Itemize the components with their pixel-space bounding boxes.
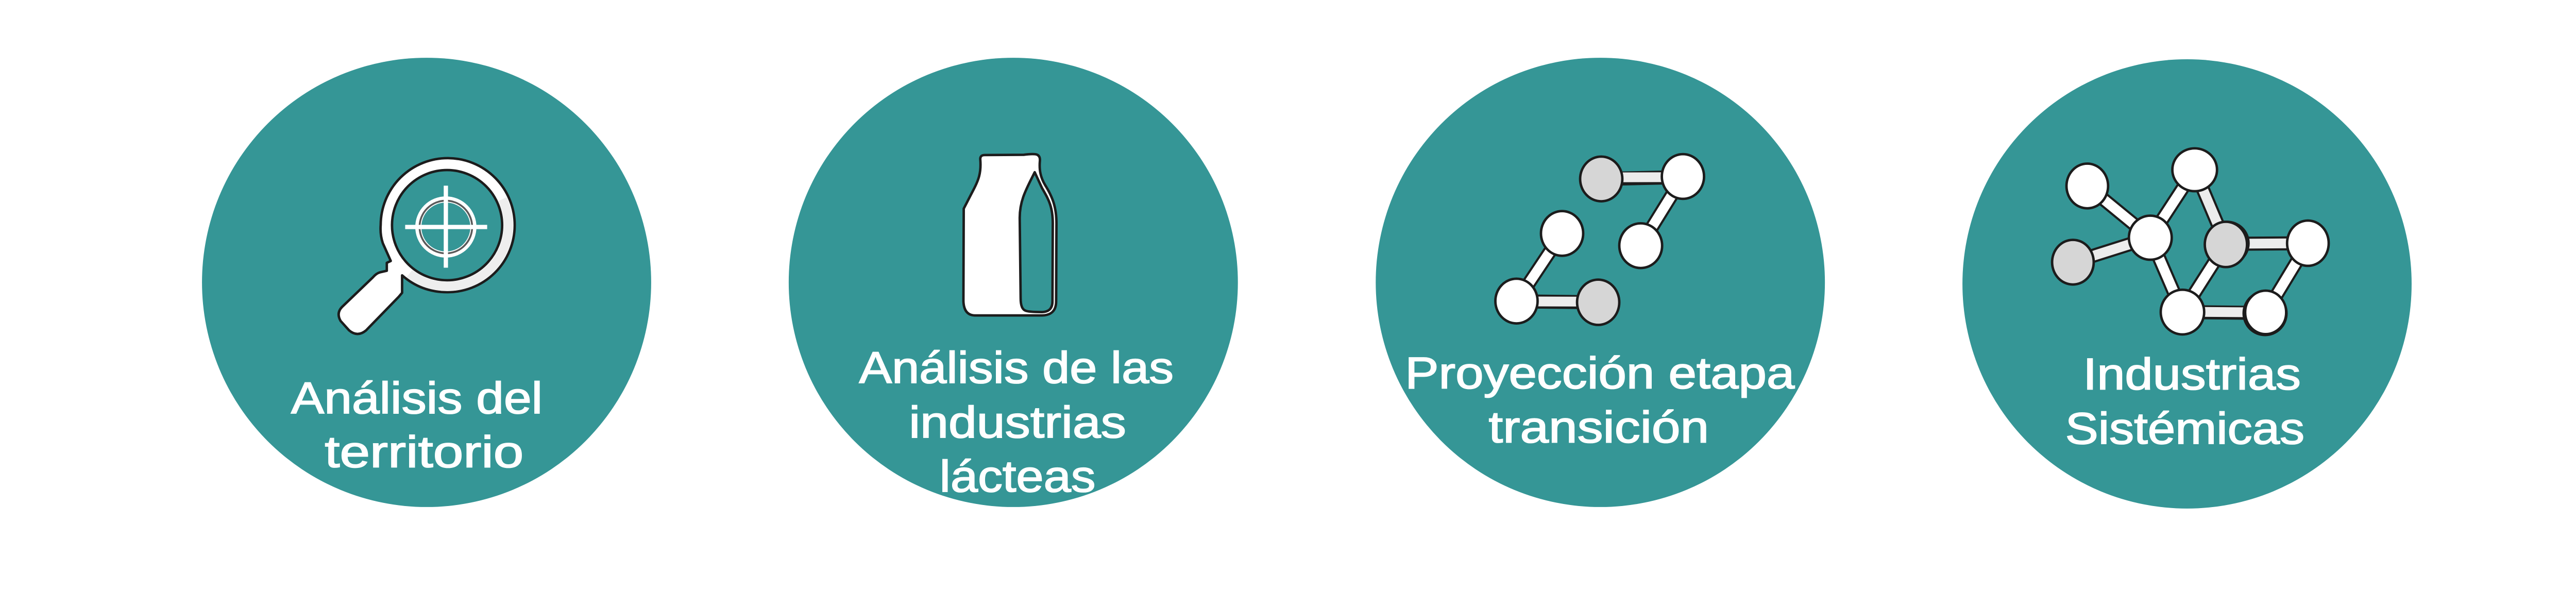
label text <box>1405 348 1794 452</box>
label text: Industrias <box>2083 349 2301 399</box>
panel: Análisis de las industrias lácteas <box>789 58 1238 507</box>
icon: magnifying glass <box>338 158 515 334</box>
teal circle background <box>202 58 651 507</box>
teal circle background <box>1376 58 1825 507</box>
teal circle background <box>789 58 1238 507</box>
label text <box>859 343 1174 501</box>
icon: molecule network <box>2052 148 2329 336</box>
label text: Análisis de las <box>859 343 1174 393</box>
label text: industrias <box>909 398 1126 447</box>
label text: Proyección etapa <box>1405 348 1794 398</box>
teal circle background <box>1962 59 2412 509</box>
label text <box>2065 349 2304 453</box>
label text: transición <box>1488 403 1709 452</box>
label text: Sistémicas <box>2065 404 2304 453</box>
label text: territorio <box>325 428 523 477</box>
label text <box>291 374 543 477</box>
icon: milk bottle <box>963 154 1057 315</box>
icon: two molecule links <box>1496 154 1704 325</box>
label text: Análisis del <box>291 374 543 423</box>
panel: Industrias Sistémicas <box>1962 59 2412 509</box>
label text: lácteas <box>940 452 1096 501</box>
panel: Análisis del territorio <box>202 58 651 507</box>
panel: Proyección etapa transición <box>1376 58 1825 507</box>
